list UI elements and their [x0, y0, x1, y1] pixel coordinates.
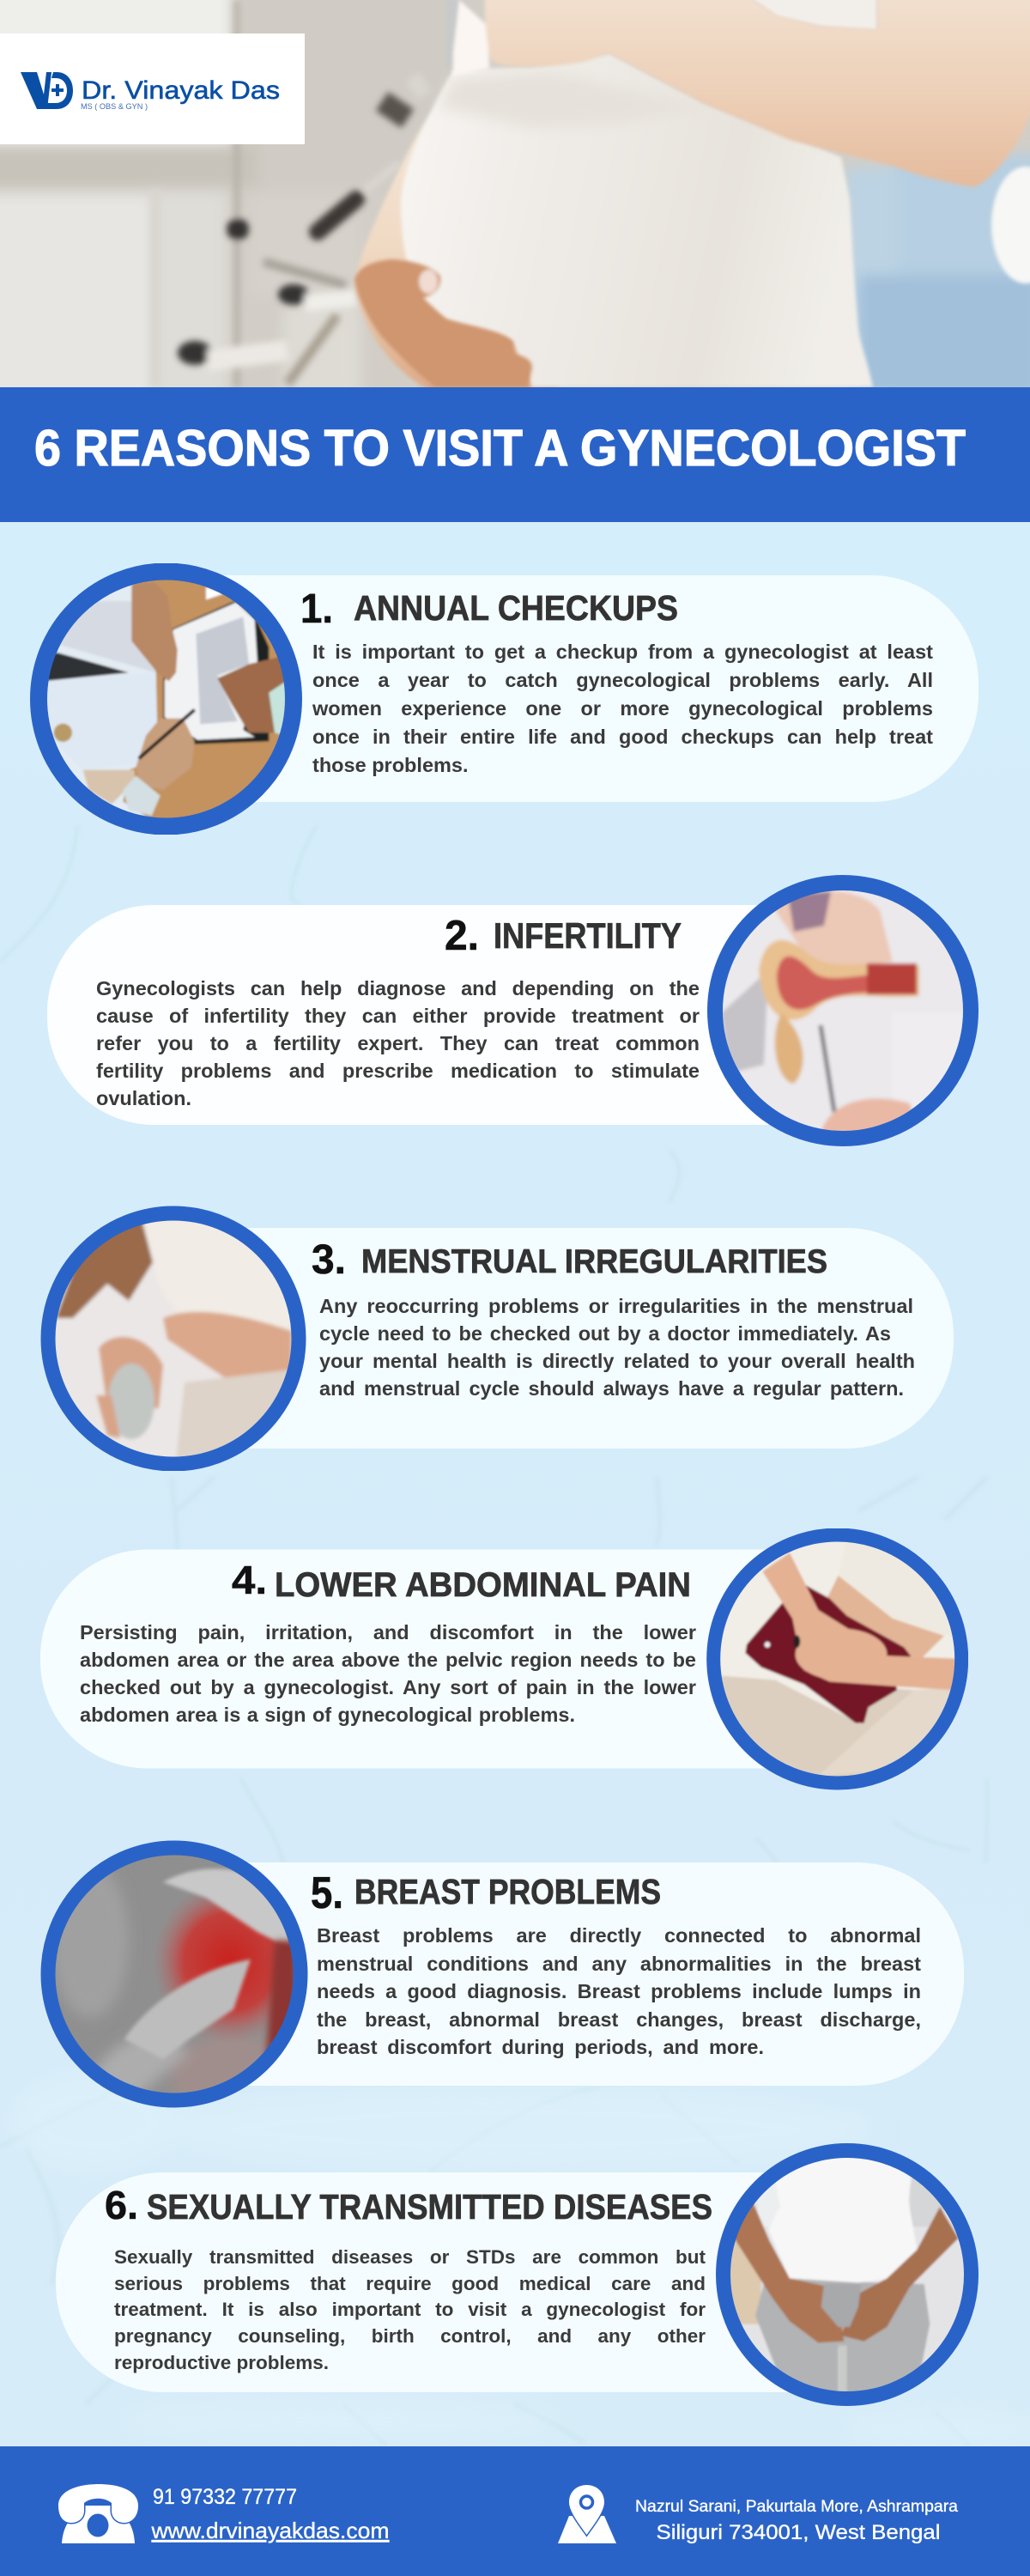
- logo wordmark: Dr. Vinayak Das: [82, 76, 280, 105]
- text block: cause of infertility they can either provide treatment or: [96, 1005, 700, 1027]
- text block: ovulation.: [96, 1087, 191, 1109]
- text block: cycle need to be checked out by a doctor immediately. As: [319, 1322, 891, 1345]
- panel: 6 sexually transmitted diseases: [56, 2143, 978, 2406]
- text block: menstrual conditions and any abnormalities in the breast: [317, 1953, 921, 1975]
- photo: doctor writing notes at a desk: [37, 569, 298, 830]
- logo credentials: MS ( OBS & GYN ): [81, 102, 148, 111]
- text block: pregnancy counseling, birth control, and any other: [114, 2325, 706, 2347]
- address line one: Nazrul Sarani, Pakurtala More, Ashrampara: [635, 2498, 958, 2516]
- heading: number and title: INFERTILITY: [494, 915, 682, 956]
- text block: [114, 2245, 725, 2382]
- text block: needs a good diagnosis. Breast problems include lumps in: [317, 1980, 921, 2002]
- photo: woman with red pain glow on the chest: [43, 1846, 309, 2121]
- heading: number and title: 4.: [232, 1558, 267, 1602]
- title banner: [0, 387, 1030, 522]
- text block: [312, 638, 952, 784]
- heading: number and title: [445, 913, 682, 959]
- text block: once a year to catch gynecological problems early. All: [312, 669, 933, 691]
- heading: number and title: [311, 1868, 661, 1918]
- text block: Any reoccurring problems or irregularities in the menstrual: [319, 1295, 913, 1317]
- panel: 3 menstrual irregularities: [41, 1206, 954, 1471]
- panel: 4 lower abdominal pain: [40, 1528, 968, 1789]
- icon: telephone: [58, 2484, 138, 2543]
- text block: those problems.: [312, 754, 469, 776]
- text block: checked out by a gynecologist. Any sort of pain in the lower: [80, 1676, 696, 1698]
- heading: number and title: MENSTRUAL IRREGULARITIES: [361, 1243, 827, 1280]
- text block: abdomen area is a sign of gynecological problems.: [80, 1704, 575, 1726]
- text block: Gynecologists can help diagnose and depending on the: [96, 977, 700, 999]
- text block: women experience one or more gynecological problems: [312, 697, 933, 720]
- heading: number and title: BREAST PROBLEMS: [354, 1872, 661, 1911]
- heading: number and title: 3.: [312, 1237, 346, 1283]
- background: pale blue with faint plant stems: [46, 2191, 47, 2192]
- text block: serious problems that require good medical care and: [114, 2273, 706, 2294]
- text block: refer you to a fertility expert. They can treat common: [96, 1032, 700, 1054]
- contact: website: www.drvinayakdas.com: [150, 2518, 389, 2543]
- icon: location pin on map: [558, 2485, 616, 2543]
- address line two: Siliguri 734001, West Bengal: [656, 2521, 941, 2544]
- logo plate: Dr. Vinayak Das: [0, 33, 305, 144]
- heading: number and title: 5.: [311, 1868, 343, 1918]
- footer bar: [0, 2446, 1030, 2576]
- photo: hands on a burgundy hot water bottle: [712, 1533, 964, 1784]
- text block: Sexually transmitted diseases or STDs are common but: [114, 2246, 706, 2268]
- text block: once in their entire life and good checkups can help treat: [312, 726, 933, 748]
- text block: abdomen area or the area above the pelvic region needs to be: [80, 1649, 696, 1671]
- text block: and menstrual cycle should always have a regular pattern.: [319, 1377, 904, 1400]
- text block: reproductive problems.: [114, 2352, 329, 2373]
- text block: fertility problems and prescribe medication to stimulate: [96, 1060, 700, 1082]
- text block: Breast problems are directly connected to abnormal: [317, 1924, 921, 1947]
- photo: anatomical uterus model: [712, 876, 978, 1142]
- text block: [96, 975, 718, 1116]
- photo: woman holding stomach and a glass of water: [43, 1211, 309, 1468]
- heading: number and title: [300, 586, 678, 632]
- heading: number and title: [312, 1237, 827, 1283]
- text block: the breast, abnormal breast changes, breast discharge,: [317, 2008, 921, 2030]
- text block: It is important to get a checkup from a gynecologist at least: [312, 641, 933, 663]
- title: 6 REASONS TO VISIT A GYNECOLOGIST: [34, 420, 966, 477]
- heading: number and title: 6.: [105, 2183, 138, 2227]
- heading: number and title: 2.: [445, 913, 479, 959]
- icon: VD monogram with medical cross: [21, 72, 73, 109]
- text block: breast discomfort during periods, and more.: [317, 2036, 764, 2058]
- heading: number and title: LOWER ABDOMINAL PAIN: [275, 1566, 691, 1604]
- text block: Persisting pain, irritation, and discomfort in the lower: [80, 1621, 696, 1643]
- panel: 2 infertility: [47, 875, 978, 1146]
- heading: number and title: SEXUALLY TRANSMITTED DISEASES: [147, 2187, 712, 2227]
- panel: 1 annual checkups: [30, 563, 978, 835]
- text block: [319, 1292, 937, 1408]
- text block: [80, 1619, 715, 1735]
- hero photo: pregnant woman holding belly: [0, 0, 1030, 387]
- photo: woman holding lower abdomen: [721, 2149, 972, 2407]
- text block: [317, 1922, 940, 2068]
- panel: 5 breast problems: [41, 1841, 964, 2107]
- contact: phone number: 91 97332 77777: [153, 2485, 297, 2509]
- text block: treatment. It is also important to visit a gynecologist for: [114, 2299, 706, 2320]
- heading: number and title: ANNUAL CHECKUPS: [354, 588, 678, 628]
- heading: number and title: 1.: [300, 586, 333, 632]
- text block: your mental health is directly related to your overall health: [319, 1350, 915, 1372]
